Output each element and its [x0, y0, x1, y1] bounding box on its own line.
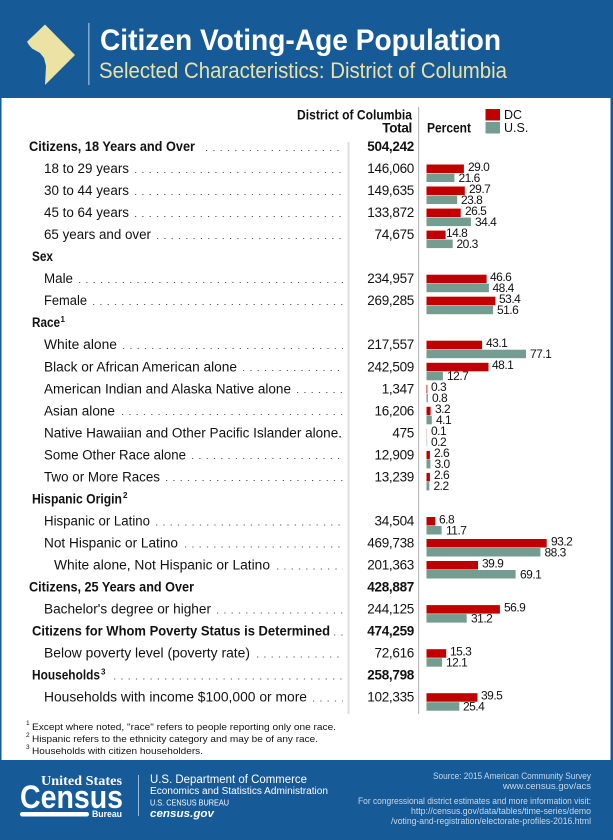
row: white alone: 77.1	[530, 347, 552, 361]
row: male: Male	[44, 271, 73, 286]
row: 18 to 29 years: 29.0	[468, 160, 490, 174]
row: 18 to 29 years	[44, 160, 490, 185]
heading: Race: 1	[60, 315, 66, 324]
header divider	[88, 23, 90, 85]
row: male	[44, 270, 515, 295]
footer: department text: U.S. Department of Commerce	[150, 774, 307, 786]
row: american indian and alaska native alone: 1,347	[382, 381, 414, 396]
row: households with income $100,000 or more: 39.5	[481, 688, 503, 702]
legend	[486, 108, 528, 135]
footer: department text: U.S. CENSUS BUREAU	[150, 798, 229, 808]
row: below poverty level: 72,616	[374, 646, 414, 661]
footnotes: 1	[26, 720, 30, 727]
footnotes: Except where noted, "race" refers to people reporting only one race.	[32, 722, 336, 733]
row: asian alone: 3.2	[435, 402, 451, 416]
row: not hispanic or latino: Not Hispanic or Latino	[44, 536, 178, 550]
subtitle: Selected Characteristics: District of Columbia	[99, 58, 508, 83]
heading: Race: Race	[32, 315, 60, 330]
row: bachelor's degree or higher	[44, 600, 526, 626]
row: white alone, not hispanic or latino: 69.1	[520, 568, 542, 582]
row: two or more races: 2.2	[434, 479, 450, 493]
heading: Hispanic Origin: 2	[123, 491, 128, 500]
row: white alone	[44, 336, 552, 361]
row: native hawaiian and other pacific islander alone	[44, 424, 447, 449]
row: female: 269,285	[367, 293, 414, 308]
row: bachelor's degree or higher: 31.2	[471, 612, 493, 626]
column heading: total: Total	[382, 120, 412, 136]
row: native hawaiian and other pacific islander alone: 475	[392, 425, 414, 440]
footer: source and links	[358, 771, 591, 827]
title: Citizen Voting-Age Population	[100, 24, 501, 57]
panel: white table area	[2, 98, 610, 760]
footnotes: 3	[26, 744, 30, 751]
row: white alone, not hispanic or latino: 39.9	[482, 556, 504, 570]
row: 65 years and over: 20.3	[456, 237, 479, 251]
footer: source and links: /voting-and-registration/electorate-profiles-2016.html	[391, 816, 591, 827]
row: female: 51.6	[497, 303, 519, 317]
row: not hispanic or latino: 93.2	[551, 534, 573, 548]
row: 65 years and over: 65 years and over	[44, 227, 151, 242]
legend: U.S.	[504, 121, 528, 135]
row: 45 to 64 years: 45 to 64 years	[44, 205, 129, 220]
row: bachelor's degree or higher: Bachelor's degree or higher	[44, 602, 211, 617]
column divider lines	[348, 107, 419, 714]
row: 45 to 64 years: 26.5	[465, 204, 487, 218]
footer: source and links: www.census.gov/acs	[502, 781, 591, 792]
row: citizens 18 and over: 504,242	[367, 139, 414, 154]
row: white alone, not hispanic or latino: 201,363	[367, 558, 414, 572]
row: hispanic or latino: 11.7	[446, 524, 467, 538]
footnotes: Hispanic refers to the ethnicity category and may be of any race.	[32, 734, 318, 745]
row: male: 48.4	[492, 281, 515, 295]
row: hispanic or latino	[44, 512, 467, 538]
row: male: 234,957	[367, 271, 414, 286]
row: households	[32, 668, 415, 683]
row: asian alone: 4.1	[436, 413, 452, 427]
row: female: Female	[44, 293, 87, 308]
row: not hispanic or latino: 88.3	[544, 546, 567, 560]
row: american indian and alaska native alone: American Indian and Alaska Native alone	[44, 381, 291, 396]
row: 45 to 64 years	[44, 204, 497, 229]
row: white alone: 217,557	[367, 337, 414, 352]
row: 65 years and over: 74,675	[374, 227, 414, 242]
footer: department text: census.gov	[150, 808, 215, 820]
footer: department text: Economics and Statistics Administration	[150, 786, 328, 797]
row: native hawaiian and other pacific islander alone: Native Hawaiian and Other Pacific Islander alone.	[44, 425, 342, 440]
column heading: percent: Percent	[427, 120, 471, 136]
row: 18 to 29 years: 146,060	[367, 161, 414, 176]
row: american indian and alaska native alone: 0.3	[431, 380, 447, 394]
row: female	[44, 292, 521, 317]
footer divider	[138, 775, 139, 816]
row: households with income $100,000 or more	[44, 688, 503, 714]
row: hispanic or latino: Hispanic or Latino	[44, 514, 150, 528]
row: asian alone: 16,206	[374, 403, 414, 418]
row: some other race alone: 2.6	[434, 446, 450, 460]
row: households with income $100,000 or more: Households with income $100,000 or more	[44, 690, 307, 705]
row: female: 53.4	[499, 292, 521, 306]
logo: United States Census Bureau: United States	[41, 774, 123, 789]
row: citizens 25 and over	[29, 580, 414, 594]
footer: department text	[150, 774, 328, 820]
column heading: total	[297, 108, 412, 136]
row: black or african american alone: Black or African American alone	[44, 359, 237, 374]
row: 18 to 29 years: 18 to 29 years	[44, 161, 129, 176]
row: households: 258,798	[367, 668, 415, 683]
footer: source and links: Source: 2015 American Community Survey	[433, 771, 591, 782]
row: households: 3	[101, 668, 106, 676]
row: 30 to 44 years: 23.8	[461, 193, 483, 207]
row: households with income $100,000 or more: 102,335	[367, 690, 414, 705]
row: below poverty level: Below poverty level (poverty rate)	[44, 646, 250, 661]
row: households with income $100,000 or more: 25.4	[463, 700, 485, 714]
row: 65 years and over: 14.8	[446, 226, 468, 240]
row: two or more races: 13,239	[374, 469, 414, 484]
row: two or more races: Two or More Races	[44, 469, 160, 484]
legend: DC	[504, 108, 522, 122]
row: 45 to 64 years: 34.4	[475, 215, 497, 229]
row: white alone: White alone	[44, 337, 117, 352]
footnotes	[26, 720, 336, 757]
row: bachelor's degree or higher: 56.9	[504, 600, 526, 614]
row: 18 to 29 years: 21.6	[458, 171, 481, 185]
row: american indian and alaska native alone	[44, 380, 448, 405]
row: american indian and alaska native alone: 0.8	[432, 391, 448, 405]
row: black or african american alone	[44, 358, 514, 383]
row: some other race alone: 12,909	[374, 447, 414, 462]
row: citizens for whom poverty status is determined: Citizens for Whom Poverty Status is Determined	[32, 624, 330, 639]
row: native hawaiian and other pacific islander alone: 0.2	[431, 435, 447, 449]
row: bachelor's degree or higher: 244,125	[367, 602, 414, 617]
row: some other race alone: 3.0	[434, 457, 451, 471]
row: white alone, not hispanic or latino: White alone, Not Hispanic or Latino	[54, 558, 270, 572]
row: citizens 18 and over	[29, 139, 414, 154]
row: citizens for whom poverty status is determined: 474,259	[367, 624, 414, 639]
row: some other race alone: Some Other Race alone	[44, 447, 186, 462]
row: white alone: 43.1	[486, 336, 508, 350]
row: hispanic or latino: 34,504	[374, 514, 415, 528]
footnotes: 2	[26, 732, 30, 739]
heading: Sex: Sex	[32, 249, 53, 264]
footnotes: Households with citizen householders.	[32, 746, 203, 757]
row: 65 years and over	[44, 226, 479, 251]
row: below poverty level: 12.1	[446, 656, 468, 670]
row: male: 46.6	[490, 270, 512, 284]
row: some other race alone	[44, 446, 451, 471]
row: white alone, not hispanic or latino	[54, 556, 542, 582]
row: 30 to 44 years	[44, 182, 491, 207]
logo: United States Census Bureau: Census	[20, 779, 123, 815]
row: 30 to 44 years: 30 to 44 years	[44, 183, 129, 198]
logo: United States Census Bureau: Bureau	[92, 809, 122, 820]
row: native hawaiian and other pacific islander alone: 0.1	[431, 424, 447, 438]
column heading: total: District of Columbia	[297, 108, 412, 122]
row: households: Households	[32, 668, 100, 683]
row: below poverty level	[44, 644, 472, 670]
row: not hispanic or latino: 469,738	[367, 536, 414, 550]
row: 30 to 44 years: 149,635	[367, 183, 414, 198]
icon: District of Columbia map	[27, 24, 75, 85]
row: not hispanic or latino	[44, 534, 573, 560]
row: two or more races: 2.6	[434, 468, 450, 482]
row: 45 to 64 years: 133,872	[367, 205, 414, 220]
row: black or african american alone: 242,509	[367, 359, 414, 374]
row: black or african american alone: 48.1	[492, 358, 514, 372]
row: 30 to 44 years: 29.7	[469, 182, 491, 196]
footer: source and links: http://census.gov/data/tables/time-series/demo	[411, 806, 591, 817]
row: citizens 18 and over: Citizens, 18 Years and Over	[29, 139, 196, 154]
heading: Hispanic Origin: Hispanic Origin	[32, 492, 122, 506]
row: citizens 25 and over: Citizens, 25 Years and Over	[29, 580, 195, 594]
row: asian alone: Asian alone	[44, 403, 115, 418]
row: black or african american alone: 12.7	[447, 369, 469, 383]
row: below poverty level: 15.3	[450, 644, 472, 658]
row: two or more races	[44, 468, 450, 493]
row: asian alone	[44, 402, 452, 427]
row: hispanic or latino: 6.8	[439, 512, 455, 526]
row: citizens 25 and over: 428,887	[367, 580, 414, 594]
